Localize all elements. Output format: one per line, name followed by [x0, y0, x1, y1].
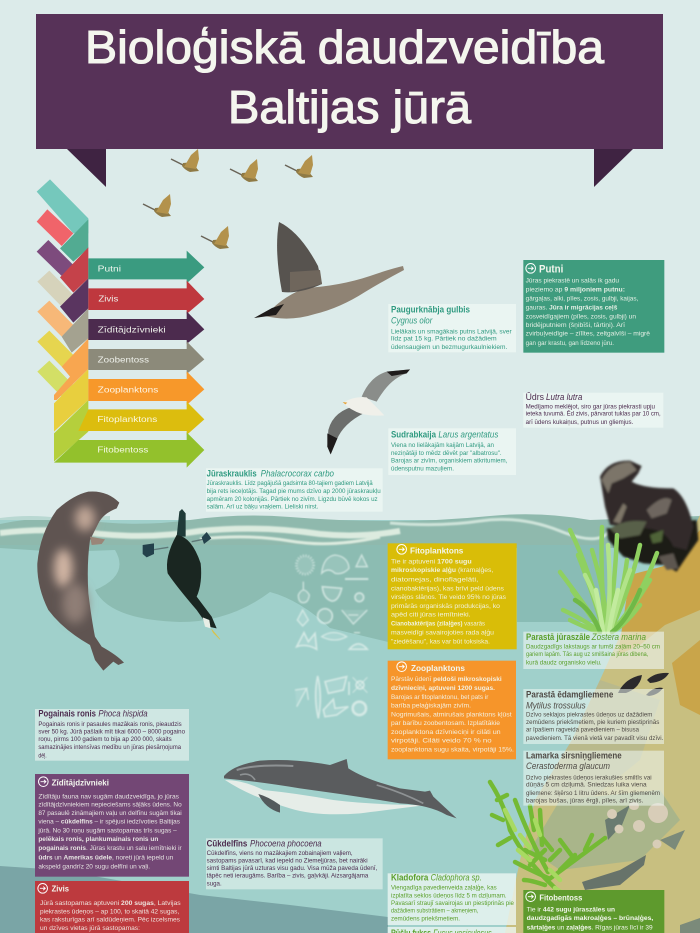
heading: cūkdelfīns [207, 839, 322, 849]
text: Fitoplanktons: Cianobaktērijas (zilaļģes) vasarās [391, 621, 485, 628]
description [38, 722, 186, 759]
panel: Zooplanktons [388, 661, 516, 759]
species name: Mytilus trossulus [526, 700, 586, 710]
arrow: Zooplanktons: Zooplanktons [98, 384, 158, 394]
description: salām. Arī uz bāķu vraķiem. Lieliski nirst. [207, 504, 319, 510]
arrow: Zivis [88, 281, 204, 314]
heading: ēdamgliemene: Parastā ēdamgliemene [526, 689, 613, 699]
text: Fitoplanktons: virsējos slāņos. Tie veido 95% no jūras [391, 595, 506, 601]
panel: Fitoplanktons [388, 543, 517, 649]
herring gull illustration [327, 369, 410, 454]
arrow: Putni [88, 251, 204, 283]
description [391, 329, 512, 351]
text: Zooplanktons: par barību zoobentosam. Izplatītākie [391, 721, 501, 727]
description [391, 443, 508, 473]
heading: kladofora: Cladophora sp. [431, 873, 482, 883]
heading: jūraskrauklis [207, 469, 334, 479]
description: tāpēc neti ieraugāms. Barība – zivis, gaļvkāji. Aizsargājama [207, 874, 369, 880]
text: Fitobentoss: sārtaļģes un zaļaļģes. Rīgas jūras līcī ir 39 [527, 924, 653, 931]
description: Pogainais ronis ir pasaules mazākais ronis, pieaudzis [38, 722, 182, 728]
info: pūšļu fukss [388, 927, 516, 933]
description [526, 775, 660, 804]
heading: sudrabkaija [391, 429, 499, 439]
description: Dzīvo seklajos piekrastes ūdeņos uz dažādiem [526, 713, 652, 719]
description [207, 481, 381, 510]
arrow: Fitobentoss [54, 432, 204, 468]
text: Zooplanktons: barība pelaģiskajām zivīm. [391, 703, 471, 710]
title [85, 21, 604, 133]
text: Zīdītājdzīvnieki: Zīdītāju fauna nav sugām daudzveidīga, jo jūras [38, 794, 179, 800]
icon: arrow circle [397, 662, 406, 671]
text: Zīdītājdzīvnieki: jūrā. No 30 roņu sugām sastopamas trīs sugas – [37, 828, 177, 834]
description [207, 851, 378, 888]
heading: sirsniņgliemene: Lamarka sirsniņgliemene [526, 750, 622, 760]
text: Zivis: un dzīves vietas jūrā sastopamas: [40, 926, 140, 932]
description: Pavasarī straujī savairojas un piestiprinās pie [391, 901, 515, 907]
info: jūraskrauklis [206, 468, 383, 512]
description: Viena no lielākajām kaijām Latvijā, an [391, 443, 494, 449]
species name: Cerastoderma glaucum [526, 761, 610, 771]
text: Zīdītājdzīvnieki: pogainais ronis. Jūras krastu un salu iemītnieki ir [38, 846, 182, 852]
text: Zooplanktons [391, 677, 514, 754]
description: Lielākais un smagākais putns Latvijā, sver [391, 329, 512, 335]
background: sea [0, 514, 700, 933]
description: apmēram 20 kolonijās. Pārtiek no zivīm. Ligzdu būvē kokos uz [207, 497, 378, 503]
heading: Ūdrs: Ūdrs [526, 392, 544, 402]
icon: arrow circle [397, 545, 406, 554]
text: Fitoplanktons: diatomejas, dinoflagelāti, [391, 577, 479, 583]
text: Putni: zosveidīgajiem (pīles, zosis, gulbji) un [526, 314, 636, 320]
text: Zivis: piekrastes ūdeņos – ap 100, to skaitā 42 sugas, [40, 909, 180, 915]
heading: ronis [38, 709, 148, 719]
seagrass Zostera [560, 527, 657, 632]
description: kurā daudz organisko vielu. [526, 660, 602, 666]
info: Ūdrs [523, 392, 663, 428]
heading: cūkdelfīns: Phocoena phocoena [250, 839, 322, 849]
arrow: Zoobentoss: Zoobentoss [98, 354, 149, 364]
description: ieteka tuvumā. Ēd zivis, pārvarot tuklas par 10 cm, [526, 411, 661, 418]
title: Baltijas jūrā [228, 81, 471, 133]
text: Fitobentoss [527, 908, 654, 931]
description: Dzīvo piekrastes ūdeņos ierakušies smiltīs vai [526, 775, 652, 781]
description: Daudzgadīgs lakstaugs ar tumši zaļām 20–50 cm [526, 644, 660, 650]
text: Zooplanktons: Nogrimušais, atmirušais planktons kļūst [391, 712, 512, 718]
text: Zooplanktons: zooplanktona dzīvnieciņi ir cilāti un [391, 730, 501, 736]
description: sastopams pavasarī, kad iepeld no Ziemeļjūras, bet nairāki [207, 858, 368, 864]
text: Putni: Jūras piekrastē un salās ik gadu [526, 279, 619, 285]
text: Zooplanktons: zooplanktona sugu skaita, virpotāji 15%. [391, 748, 514, 754]
heading: kladofora [391, 873, 482, 883]
arrow: Zīdītājdzīvnieki: Zīdītājdzīvnieki [98, 324, 166, 334]
text: Zooplanktons: virpotāji. Cilāti veido 70 % no [391, 739, 493, 745]
arrow: Fitoplanktons [78, 402, 204, 435]
heading: cūkdelfīns: Cūkdelfīns [207, 839, 247, 849]
info: sudrabkaija [388, 428, 516, 475]
cockle shells [607, 802, 668, 848]
description: dažādiem substrātiem – akmeņiem, [391, 908, 479, 914]
heading: ronis: Pogainais ronis [38, 709, 96, 719]
description: Barojas ar zivīm, organiskiem atkritumiem, [391, 459, 508, 465]
swan illustration [254, 222, 404, 319]
heading: jūraszāle: Zostera marina [591, 632, 646, 642]
text: Zīdītājdzīvnieki: zīdītājdzīvniekiem nepieciešams sāļāks ūdens. No [38, 802, 182, 808]
arrow: Zīdītājdzīvnieki [88, 311, 204, 344]
info: ēdamgliemene [523, 689, 664, 744]
heading: gulbis: Paugurknābja gulbis [391, 305, 470, 315]
description: gariem lapām. Tās aug uz smilšaina jūras dibena, [526, 652, 649, 658]
text: Zivis [40, 901, 181, 932]
icon: arrow circle [38, 884, 47, 893]
description [526, 644, 660, 666]
text: Fitoplanktons: apēd citi jūras iemītnieki. [391, 613, 471, 619]
icon: arrow circle [526, 892, 535, 901]
category legend ribbons [37, 179, 204, 468]
description: dūņās 5 cm dziļumā. Sniedzas luika viena [526, 783, 647, 789]
heading: sudrabkaija: Sudrabkaija [391, 429, 437, 439]
description: gliemene: šķērso 1 litru ūdens. Ar šīm gliemenēm [526, 791, 660, 797]
description: neziņātāji to mēdz dēvēt par "albatrosu". [391, 451, 502, 457]
seabed [505, 515, 700, 933]
text: Fitoplanktons: "ziedēšanu", kas var būt toksiska. [391, 639, 490, 645]
heading: Ūdrs [526, 392, 582, 402]
description [391, 884, 515, 923]
description: ar īpašiem ragveida pavedieniem – bisusa [526, 728, 640, 734]
birds: geese flock [143, 149, 313, 249]
icon: arrow circle [526, 264, 535, 273]
text: Putni: gan gar krastu, gan līdzeno jūru. [526, 341, 614, 347]
description: izplatīta seklos ūdeņos līdz 5 m dziļumam. [391, 894, 507, 900]
description: ūdensputnu mazuļiem. [391, 467, 454, 473]
arrow: Fitoplanktons: Fitoplanktons [97, 414, 157, 424]
zooplankton drawings [295, 676, 367, 718]
heading: kladofora: Kladofora [391, 873, 429, 883]
text: Fitoplanktons: mikroskopiskie aļģu (kramaļģes, [391, 567, 494, 574]
text: Fitoplanktons: primārās organiskās produkcijas, ko [391, 604, 501, 610]
info: cūkdelfīns [206, 838, 383, 889]
info: gulbis [388, 304, 516, 352]
description: Viengadīga pavedienveida zaļaļģe, kas [391, 884, 497, 891]
description: līdz pat 15 kg. Pārtiek no dažādiem [391, 337, 497, 343]
text: Putni [526, 279, 651, 347]
text: Zīdītājdzīvnieki: pelēkais ronis, plankumainais ronis un [38, 837, 159, 843]
text: Zīdītājdzīvnieki [37, 794, 182, 870]
description: zemūdens priekšmetiem. [391, 917, 460, 923]
heading: jūraskrauklis: Jūraskrauklis [207, 469, 257, 479]
description: bija rets ieceļotājs. Tagad pie mums dzīvo ap 2000 jūraskraukļu [207, 489, 381, 495]
description: Medījamo meklējot, siro gar jūras piekrasti upju [526, 405, 655, 411]
description: samazinājies intensīvas medību un jūras piesārņojuma [38, 745, 182, 751]
heading: jūraszāle [526, 632, 646, 642]
description: Cūkdelfīns, viens no mazākajiem zobainajiem vaļiem, [207, 851, 353, 857]
text: Fitoplanktons: masveidīgi savairojoties rada aļģu [391, 629, 494, 636]
text: Zooplanktons: dzīvnieciņi, aptuveni 1200 sugas. [391, 686, 495, 692]
heading: Fitobentoss: Fitobentoss [539, 892, 582, 902]
description: ūdensaugiem un bezmugurkaulniekiem. [391, 345, 508, 351]
species name: Cygnus olor [391, 315, 433, 325]
description [526, 713, 664, 742]
text: Putni: gārgaļas, alki, pīles, zosis, gulbji, kaijas, [526, 297, 639, 303]
text: Putni: pieziemo ap 9 miljoniem putnu: [526, 288, 625, 294]
icon: arrow circle [39, 777, 48, 786]
heading: jūraskrauklis: Phalacrocorax carbo [261, 469, 334, 479]
arrow: Zivis: Zivis [98, 294, 118, 304]
text: Fitoplanktons [391, 559, 506, 645]
title: Bioloģiskā daudzveidība [85, 21, 604, 73]
text: Zīdītājdzīvnieki: akspeld gandrīz 20 sugu delfīni un vaļi. [38, 864, 150, 870]
heading: jūraszāle: Parastā jūraszāle [526, 632, 590, 642]
cormorant illustration [143, 509, 220, 639]
heading: Zooplanktons: Zooplanktons [411, 663, 465, 673]
panel: Putni [523, 260, 664, 353]
text: Zooplanktons: Barojas ar fitoplanktonu, bet pats ir [391, 695, 488, 701]
text: Zooplanktons: Pārstāv ūdenī peldoši mikroskopiski [391, 677, 502, 683]
info: sirsniņgliemene [523, 750, 664, 806]
panel: Fitobentoss [523, 890, 664, 933]
porpoise illustration [224, 759, 457, 818]
description: barojas bušas, jūras ērgļi, pīles, arī zivis. [526, 798, 644, 804]
description: sver 50 kg. Jūrā pašlaik mīt tikai 6000 – 8000 pogaino [38, 729, 186, 735]
text: Fitoplanktons: cianobaktērijas), kas brīvi peld ūdens [391, 586, 504, 592]
info: kladofora [388, 873, 516, 925]
panel: Zīdītājdzīvnieki [35, 774, 189, 877]
arrow: Zooplanktons [88, 371, 204, 405]
text: Zivis: Jūrā sastopamas aptuveni 200 sugas, Latvijas [40, 901, 181, 907]
description: suga. [207, 882, 222, 888]
heading: Putni: Putni [539, 264, 563, 276]
mussels [618, 673, 669, 696]
description: arī ūdens kukaiņus, putnus un gliemjus. [526, 420, 634, 426]
info: pogainais ronis [35, 709, 189, 761]
heading: sudrabkaija: Larus argentatus [438, 429, 499, 439]
description [526, 405, 661, 426]
text: Zīdītājdzīvnieki: ūdrs un Amerikas ūdele, noreti jūrā iepeld un [38, 855, 173, 861]
title banner [36, 14, 663, 187]
description: simti Baltijas jūrā uzturas visu gadu. Visa mūža paveda ūdenī, [207, 866, 378, 872]
description: Jūraskrauklis. Līdz pagājušā gadsimta 80-tajiem gadiem Latvijā [207, 481, 373, 487]
text: Putni: gauras. Jūra ir migrācijas ceļš [526, 305, 618, 311]
arrow: Zoobentoss [88, 341, 204, 374]
text: Fitobentoss: Tie ir 442 sugu jūraszāles un [527, 908, 615, 914]
seal illustration [37, 491, 124, 671]
arrow: Putni: Putni [98, 264, 121, 274]
description: roņu, pirms 100 gadiem to bija ap 200 000, skaits [38, 737, 172, 743]
heading: Fitoplanktons: Fitoplanktons [410, 545, 464, 555]
otter illustration on rock [600, 461, 698, 572]
text: Fitobentoss: daudzgadīgās makroaļģes – brūnaļģes, [527, 915, 654, 922]
text: Fitoplanktons: Tie ir aptuveni 1700 sugu [391, 559, 472, 565]
description: dēļ. [38, 753, 47, 759]
heading: ronis: Phoca hispida [98, 709, 148, 719]
text: Putni: zvirbuļveidīgie – zīlītes, zeltgalvīši – migrē [526, 332, 651, 338]
info: jūraszāle [523, 632, 664, 669]
panel: Zivis [35, 881, 189, 933]
phytoplankton drawings [296, 555, 368, 649]
heading: Zīdītājdzīvnieki: Zīdītājdzīvnieki [52, 778, 109, 788]
text: Zīdītājdzīvnieki: viena – cūkdelfīns – ir spējusi iedzīvoties Baltijas [38, 819, 180, 825]
text: Zivis: kas raksturīgas arī saldūdeņiem. Pēc izcelsmes [40, 918, 180, 924]
text: Zīdītājdzīvnieki: 87 pasaulē zināmajiem vaļu un delfīnu sugām tikai [38, 811, 182, 817]
description: pavedieniem. Tā vienā vietā var pavadīt visu dzīvi. [526, 736, 664, 742]
text: Putni: bridējputniem (šņibīši, tārtiņi). Arī [526, 323, 625, 329]
description: zemūdens priekšmetiem, pie kuriem piestiprinās [526, 720, 659, 726]
arrow: Fitobentoss: Fitobentoss [97, 444, 148, 454]
heading: Zivis: Zivis [52, 883, 69, 893]
heading: Ūdrs: Lutra lutra [546, 392, 582, 402]
seaweed Cladophora [490, 782, 605, 895]
